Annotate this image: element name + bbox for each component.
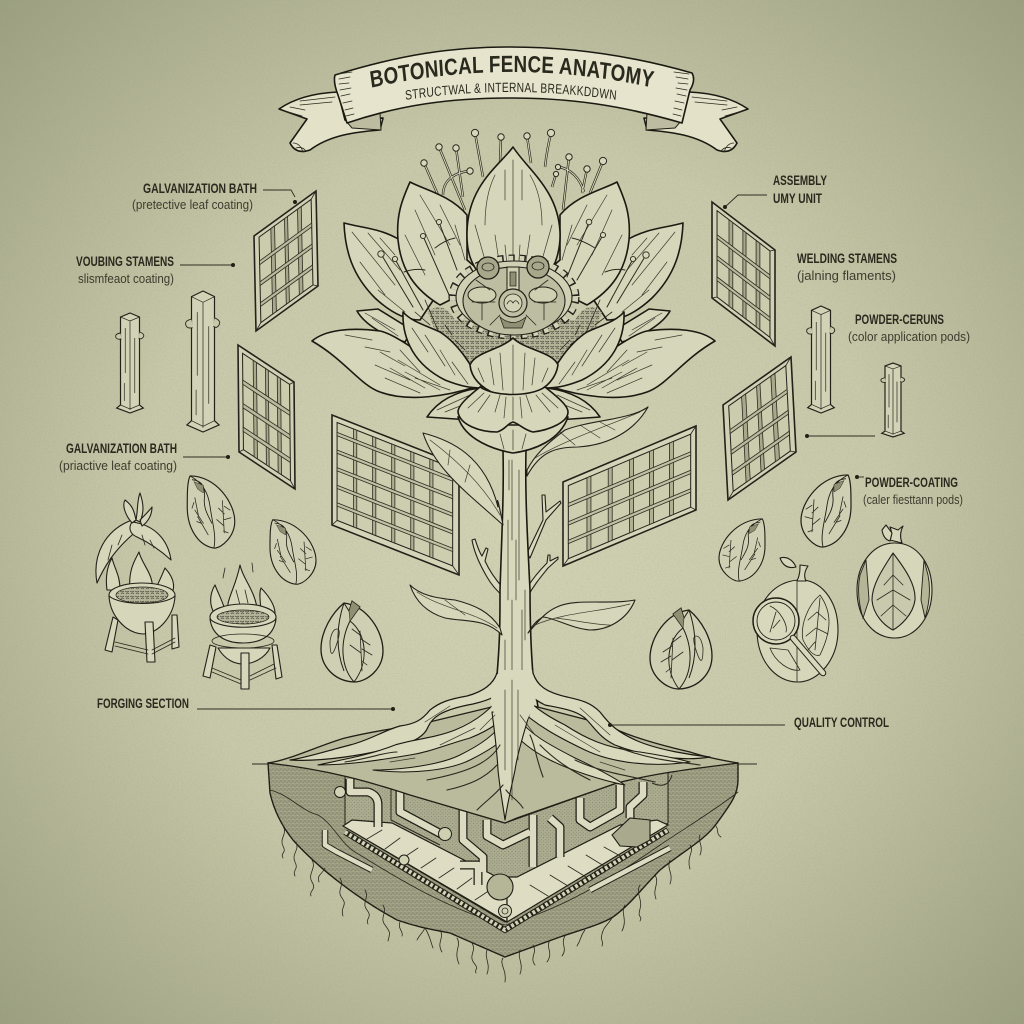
label: galvanization bath top: (pretective leaf coating) (132, 197, 253, 212)
back petals: right side (537, 182, 683, 342)
seed pod: right middle (719, 519, 765, 581)
trunk blend (490, 670, 536, 730)
fence panel: upper right (712, 202, 775, 346)
valve tank (487, 874, 513, 900)
lotus calyx (458, 387, 568, 453)
fence panel: large right (563, 426, 696, 566)
tree roots on surface (290, 670, 710, 820)
label: pouring stamens: VOUBING STAMENS (76, 254, 174, 269)
label: welding stamens (797, 251, 897, 283)
label: pouring stamens (76, 254, 235, 286)
label: powder-coating: POWDER-COATING (865, 475, 958, 490)
root: upper right (520, 673, 710, 759)
seed pod: left lower (321, 601, 383, 682)
front petals: right side (545, 312, 715, 420)
fence post: right short (881, 363, 905, 437)
title banner (278, 46, 749, 152)
fence panel: large left (332, 415, 459, 575)
icon: cut leaf fruit (857, 525, 932, 638)
central gear mechanism (453, 256, 575, 335)
soil body (268, 763, 738, 957)
stem trunk (490, 450, 540, 720)
cavity walls (345, 770, 668, 922)
conveyor belt (343, 820, 668, 930)
label: powder-coating: (caler fiesttann pods) (863, 492, 963, 507)
fence panel: middle left (238, 345, 295, 489)
fence panel: upper left (254, 191, 318, 331)
callout line: right post (805, 434, 875, 438)
lotus flower (312, 147, 715, 453)
back petals: left side (344, 182, 490, 342)
lower left leaf (410, 585, 502, 635)
upper right leaf (527, 407, 648, 476)
inner stamen cluster (378, 219, 649, 368)
central upper petal (467, 147, 560, 285)
ground surface (268, 705, 738, 823)
stamens above lotus (421, 129, 607, 210)
taproot (492, 712, 530, 820)
fence post: left short (116, 313, 144, 413)
soil block cross-section (252, 705, 757, 957)
label: galvanization bath lower: GALVANIZATION BATH (66, 441, 177, 456)
root: lower right (510, 715, 625, 785)
seed pod: left upper (187, 476, 235, 548)
label: galvanization bath top (132, 181, 297, 212)
label: powder-coating (855, 475, 963, 507)
label: galvanization bath top: GALVANIZATION BATH (143, 181, 257, 196)
label: powder-cerens: (color application pods) (848, 329, 970, 344)
title text: BOTONICAL FENCE ANATOMY (370, 56, 654, 88)
root: upper left (290, 673, 510, 760)
fence panel: middle right (723, 357, 796, 500)
center front petal (470, 338, 558, 397)
root: lower left (373, 720, 512, 772)
label: quality control: QUALITY CONTROL (794, 715, 889, 730)
boulder (612, 818, 650, 847)
label: assembly unit: UMY UNIT (773, 191, 823, 206)
fence post: right tall (807, 306, 835, 413)
label: forging section: FORGING SECTION (97, 696, 189, 711)
icon: inspected pod with magnifying glass (753, 557, 838, 682)
front petals: left side (312, 312, 482, 420)
label: forging section (97, 696, 395, 711)
label: galvanization bath lower: (priactive leaf coating) (59, 458, 177, 473)
label: welding stamens: (jalning flaments) (797, 268, 896, 283)
icon: brazier with leaf canopy (96, 493, 179, 662)
icon: brazier with flames (203, 563, 282, 689)
subtitle text: STRUCTWAL & INTERNAL BREAKKDDWN (406, 82, 616, 100)
label: powder-cerens (848, 312, 970, 344)
label: powder-cerens: POWDER-CERUNS (855, 312, 944, 327)
seed pod: right lower (650, 608, 712, 689)
label: galvanization bath lower (59, 441, 230, 473)
label: welding stamens: WELDING STAMENS (797, 251, 897, 266)
pipework (325, 775, 672, 890)
seed pod: left middle (270, 520, 316, 584)
upper left leaf (423, 433, 503, 525)
root: middle right (515, 690, 690, 764)
label: quality control (608, 715, 889, 730)
lower right leaf (528, 600, 635, 633)
label: assembly unit (723, 173, 827, 209)
seed pod: right upper (801, 475, 851, 547)
hanging rootlets (282, 825, 721, 982)
root: middle left (318, 690, 515, 765)
label: assembly unit: ASSEMBLY (773, 173, 827, 188)
label: pouring stamens: slismfeaot coating) (78, 271, 174, 286)
fence post: left tall (186, 291, 220, 432)
tree stem and branches (410, 407, 648, 720)
